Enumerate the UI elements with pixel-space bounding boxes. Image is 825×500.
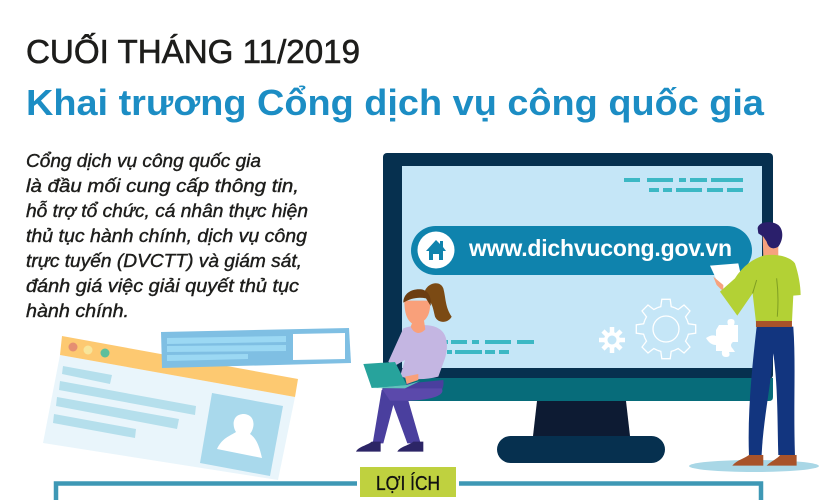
URL pill (411, 226, 752, 275)
benefits label (360, 467, 456, 497)
screen dashes: top right (624, 178, 743, 192)
hair ponytail (425, 283, 452, 322)
monitor (383, 153, 773, 463)
benefits frame (56, 484, 761, 500)
intro text block: là đầu mối cung cấp thông tin, (26, 176, 299, 196)
belt (756, 321, 792, 327)
laptop (363, 362, 420, 388)
paper (710, 263, 742, 294)
shirt folds (753, 278, 778, 317)
icon: puzzle piece (706, 319, 738, 357)
shoes (356, 442, 423, 452)
hand (405, 374, 418, 384)
top (388, 325, 447, 379)
illustration: profile card (43, 336, 298, 480)
hair (758, 222, 782, 248)
benefits label: LỢI ÍCH (376, 472, 440, 495)
intro text block: thủ tục hành chính, dịch vụ công (26, 226, 307, 246)
icon: large gear outline (636, 299, 696, 359)
legs (373, 380, 444, 443)
shirt (720, 255, 801, 322)
screen dashes: lower left (443, 340, 534, 354)
neck and face (404, 301, 430, 333)
intro text block (26, 151, 308, 321)
neck and hand (713, 235, 778, 292)
intro text block: hành chính. (26, 301, 129, 321)
illustration: search panel (161, 328, 351, 368)
person: man upper body (710, 222, 801, 327)
title: main heading: Khai trương Cổng dịch vụ công quốc gia (26, 82, 765, 123)
intro text block: Cổng dịch vụ công quốc gia (26, 151, 261, 171)
title: date line: CUỐI THÁNG 11/2019 (26, 32, 360, 70)
icon: home (418, 232, 454, 268)
hair (403, 289, 431, 306)
person: man legs and shoes (732, 327, 797, 466)
intro text block: trực tuyến (DVCTT) và giám sát, (26, 251, 302, 271)
person: woman with laptop (356, 283, 452, 452)
person: man shadow (689, 460, 819, 472)
intro text block: hỗ trợ tổ chức, cá nhân thực hiện (26, 201, 308, 221)
intro text block: đánh giá việc giải quyết thủ tục (26, 276, 299, 296)
URL text: www.dichvucong.gov.vn (468, 235, 732, 261)
icon: small gear (599, 327, 625, 353)
